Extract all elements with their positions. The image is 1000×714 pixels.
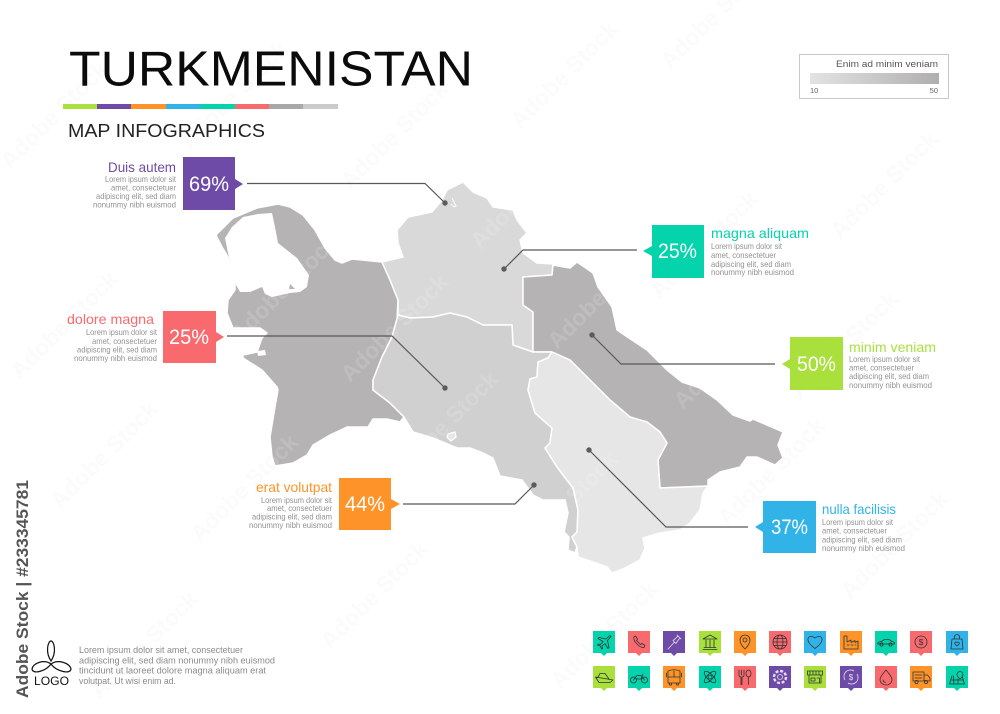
text: Adobe Stock (465, 136, 583, 254)
callout: nulla facilisis 37%: adipiscing elit, sed diam (822, 536, 902, 544)
text: Adobe Stock (505, 16, 623, 134)
icon: ship (593, 666, 615, 691)
title: TURKMENISTAN (69, 42, 473, 96)
icon: plane (593, 631, 615, 656)
logo: LOGO (34, 676, 69, 688)
icon: water drop (875, 666, 897, 691)
stock credit: Adobe Stock | #233345781 (14, 480, 32, 698)
text: Adobe Stock (185, 429, 303, 547)
legend: 50 (930, 86, 938, 95)
callout: Duis autem 69%: Lorem ipsum dolor sit (105, 175, 177, 184)
callout: minim veniam 50%: minim veniam (849, 339, 936, 355)
callout: minim veniam 50%: adipiscing elit, sed diam (849, 372, 929, 381)
callout: Duis autem 69%: Duis autem (108, 159, 176, 175)
callout: magna aliquam 25%: Lorem ipsum dolor sit (711, 242, 783, 251)
legend (800, 54, 948, 98)
icon: phone (628, 631, 650, 656)
callout: erat volutpat 44%: adipiscing elit, sed diam (252, 512, 332, 522)
callout: Duis autem 69% (93, 157, 448, 210)
icon: store (804, 666, 826, 691)
callout: erat volutpat 44%: erat volutpat (256, 479, 332, 495)
text: Adobe Stock (545, 576, 663, 694)
callout: magna aliquam 25% (501, 225, 809, 278)
text: Adobe Stock (185, 429, 303, 547)
callout: magna aliquam 25%: nonummy nibh euismod (711, 268, 794, 277)
footer text: Lorem ipsum dolor sit amet, consectetuer (79, 645, 243, 655)
text: Adobe Stock (85, 586, 203, 704)
text: Adobe Stock (825, 126, 943, 244)
text: Adobe Stock (315, 536, 433, 654)
callout: erat volutpat 44%: nonummy nibh euismod (249, 521, 332, 530)
text: Adobe Stock (175, 36, 293, 154)
bay (225, 213, 309, 297)
text: Adobe Stock (5, 266, 123, 384)
icon: bus (663, 666, 685, 691)
callout: magna aliquam 25%: magna aliquam (711, 225, 809, 241)
callout: erat volutpat 44%: amet, consectetuer (267, 504, 332, 513)
callout: Duis autem 69%: adipiscing elit, sed diam (96, 192, 176, 201)
icon: globe (769, 631, 791, 656)
region: west (216, 204, 404, 466)
region: east (523, 262, 783, 488)
text: Adobe Stock (712, 413, 830, 531)
colour bar (63, 104, 338, 109)
text: Adobe Stock (668, 296, 786, 414)
icon: recycle dollar (840, 666, 862, 691)
logo (32, 641, 71, 688)
callout: dolore magna 25%: Lorem ipsum dolor sit (86, 328, 158, 337)
legend: 10 (810, 86, 818, 95)
region: central (373, 313, 578, 553)
text: Adobe Stock (505, 446, 623, 564)
footer text: adipiscing elit, sed diam nonummy nibh euismod (79, 656, 275, 666)
region: north (382, 182, 553, 352)
icon: bank (699, 631, 721, 656)
callout: minim veniam 50%: Lorem ipsum dolor sit (849, 355, 921, 364)
callout: nulla facilisis 37%: 37% (771, 516, 808, 539)
callout: magna aliquam 25%: adipiscing elit, sed diam (711, 260, 791, 269)
text: Adobe Stock (385, 366, 503, 484)
icon: factory (840, 631, 862, 656)
icon: motorcycle (628, 666, 650, 691)
callout: nulla facilisis 37% (586, 447, 905, 553)
callout: dolore magna 25%: adipiscing elit, sed diam (77, 346, 157, 354)
icon: location (734, 631, 756, 656)
callout: nulla facilisis 37%: nonummy nibh euismod (822, 544, 905, 553)
callout: magna aliquam 25%: 25% (658, 240, 697, 263)
callout: nulla facilisis 37%: Lorem ipsum dolor sit (822, 518, 894, 527)
callout: dolore magna 25%: amet, consectetuer (92, 337, 157, 346)
text: Adobe Stock (45, 396, 163, 514)
text: Adobe Stock (785, 286, 903, 404)
footer text: tincidunt ut laoreet dolore magna aliquam erat (79, 666, 266, 676)
callout: magna aliquam 25%: amet, consectetuer (711, 251, 776, 260)
footer text (79, 645, 275, 686)
callout: minim veniam 50%: nonummy nibh euismod (849, 381, 932, 390)
callout: nulla facilisis 37%: nulla facilisis (822, 501, 896, 517)
legend: Enim ad minim veniam (836, 59, 938, 69)
text: Adobe Stock (225, 229, 343, 347)
inlet and small lakes (257, 198, 456, 441)
callout: dolore magna 25%: dolore magna (67, 311, 154, 327)
icon: map marker (946, 666, 968, 691)
callout: Duis autem 69%: 69% (189, 173, 229, 196)
text: Adobe Stock (542, 236, 660, 354)
icon: truck (910, 666, 932, 691)
callout: dolore magna 25%: 25% (169, 326, 209, 349)
icon: cutlery (734, 666, 756, 691)
icon: shopping bag (946, 631, 968, 656)
text: Adobe Stock (835, 486, 953, 604)
icon: dollar coin: $ (919, 637, 924, 647)
callout: dolore magna 25% (67, 311, 448, 391)
map of Turkmenistan (216, 182, 783, 573)
callout: Duis autem 69%: nonummy nibh euismod (93, 200, 176, 210)
icon: car (875, 631, 897, 656)
callout: erat volutpat 44%: Lorem ipsum dolor sit (261, 496, 333, 505)
icon: pin (663, 631, 685, 656)
callout: minim veniam 50%: 50% (797, 353, 836, 376)
text: Adobe Stock (335, 76, 453, 194)
text: Adobe Stock (645, 186, 763, 304)
icon: heart (804, 631, 826, 656)
callout: dolore magna 25%: nonummy nibh euismod (74, 354, 157, 363)
subtitle: MAP INFOGRAPHICS (68, 121, 265, 141)
callout: erat volutpat 44%: 44% (345, 493, 385, 516)
icon: recycle dollar: $ (849, 673, 854, 682)
region: south (528, 352, 708, 573)
callout: Duis autem 69%: amet, consectetuer (111, 184, 176, 193)
callout: erat volutpat 44% (249, 478, 537, 530)
icon: dollar coin (910, 631, 932, 656)
footer text: volutpat. Ut wisi enim ad. (79, 676, 176, 686)
icon grid (593, 631, 968, 691)
callout: nulla facilisis 37%: amet, consectetuer (822, 526, 887, 536)
callout: minim veniam 50%: amet, consectetuer (849, 364, 914, 372)
callout: minim veniam 50% (589, 332, 936, 390)
icon: gear (769, 666, 791, 691)
icon: atom (699, 666, 721, 691)
text: Adobe Stock (335, 269, 453, 387)
